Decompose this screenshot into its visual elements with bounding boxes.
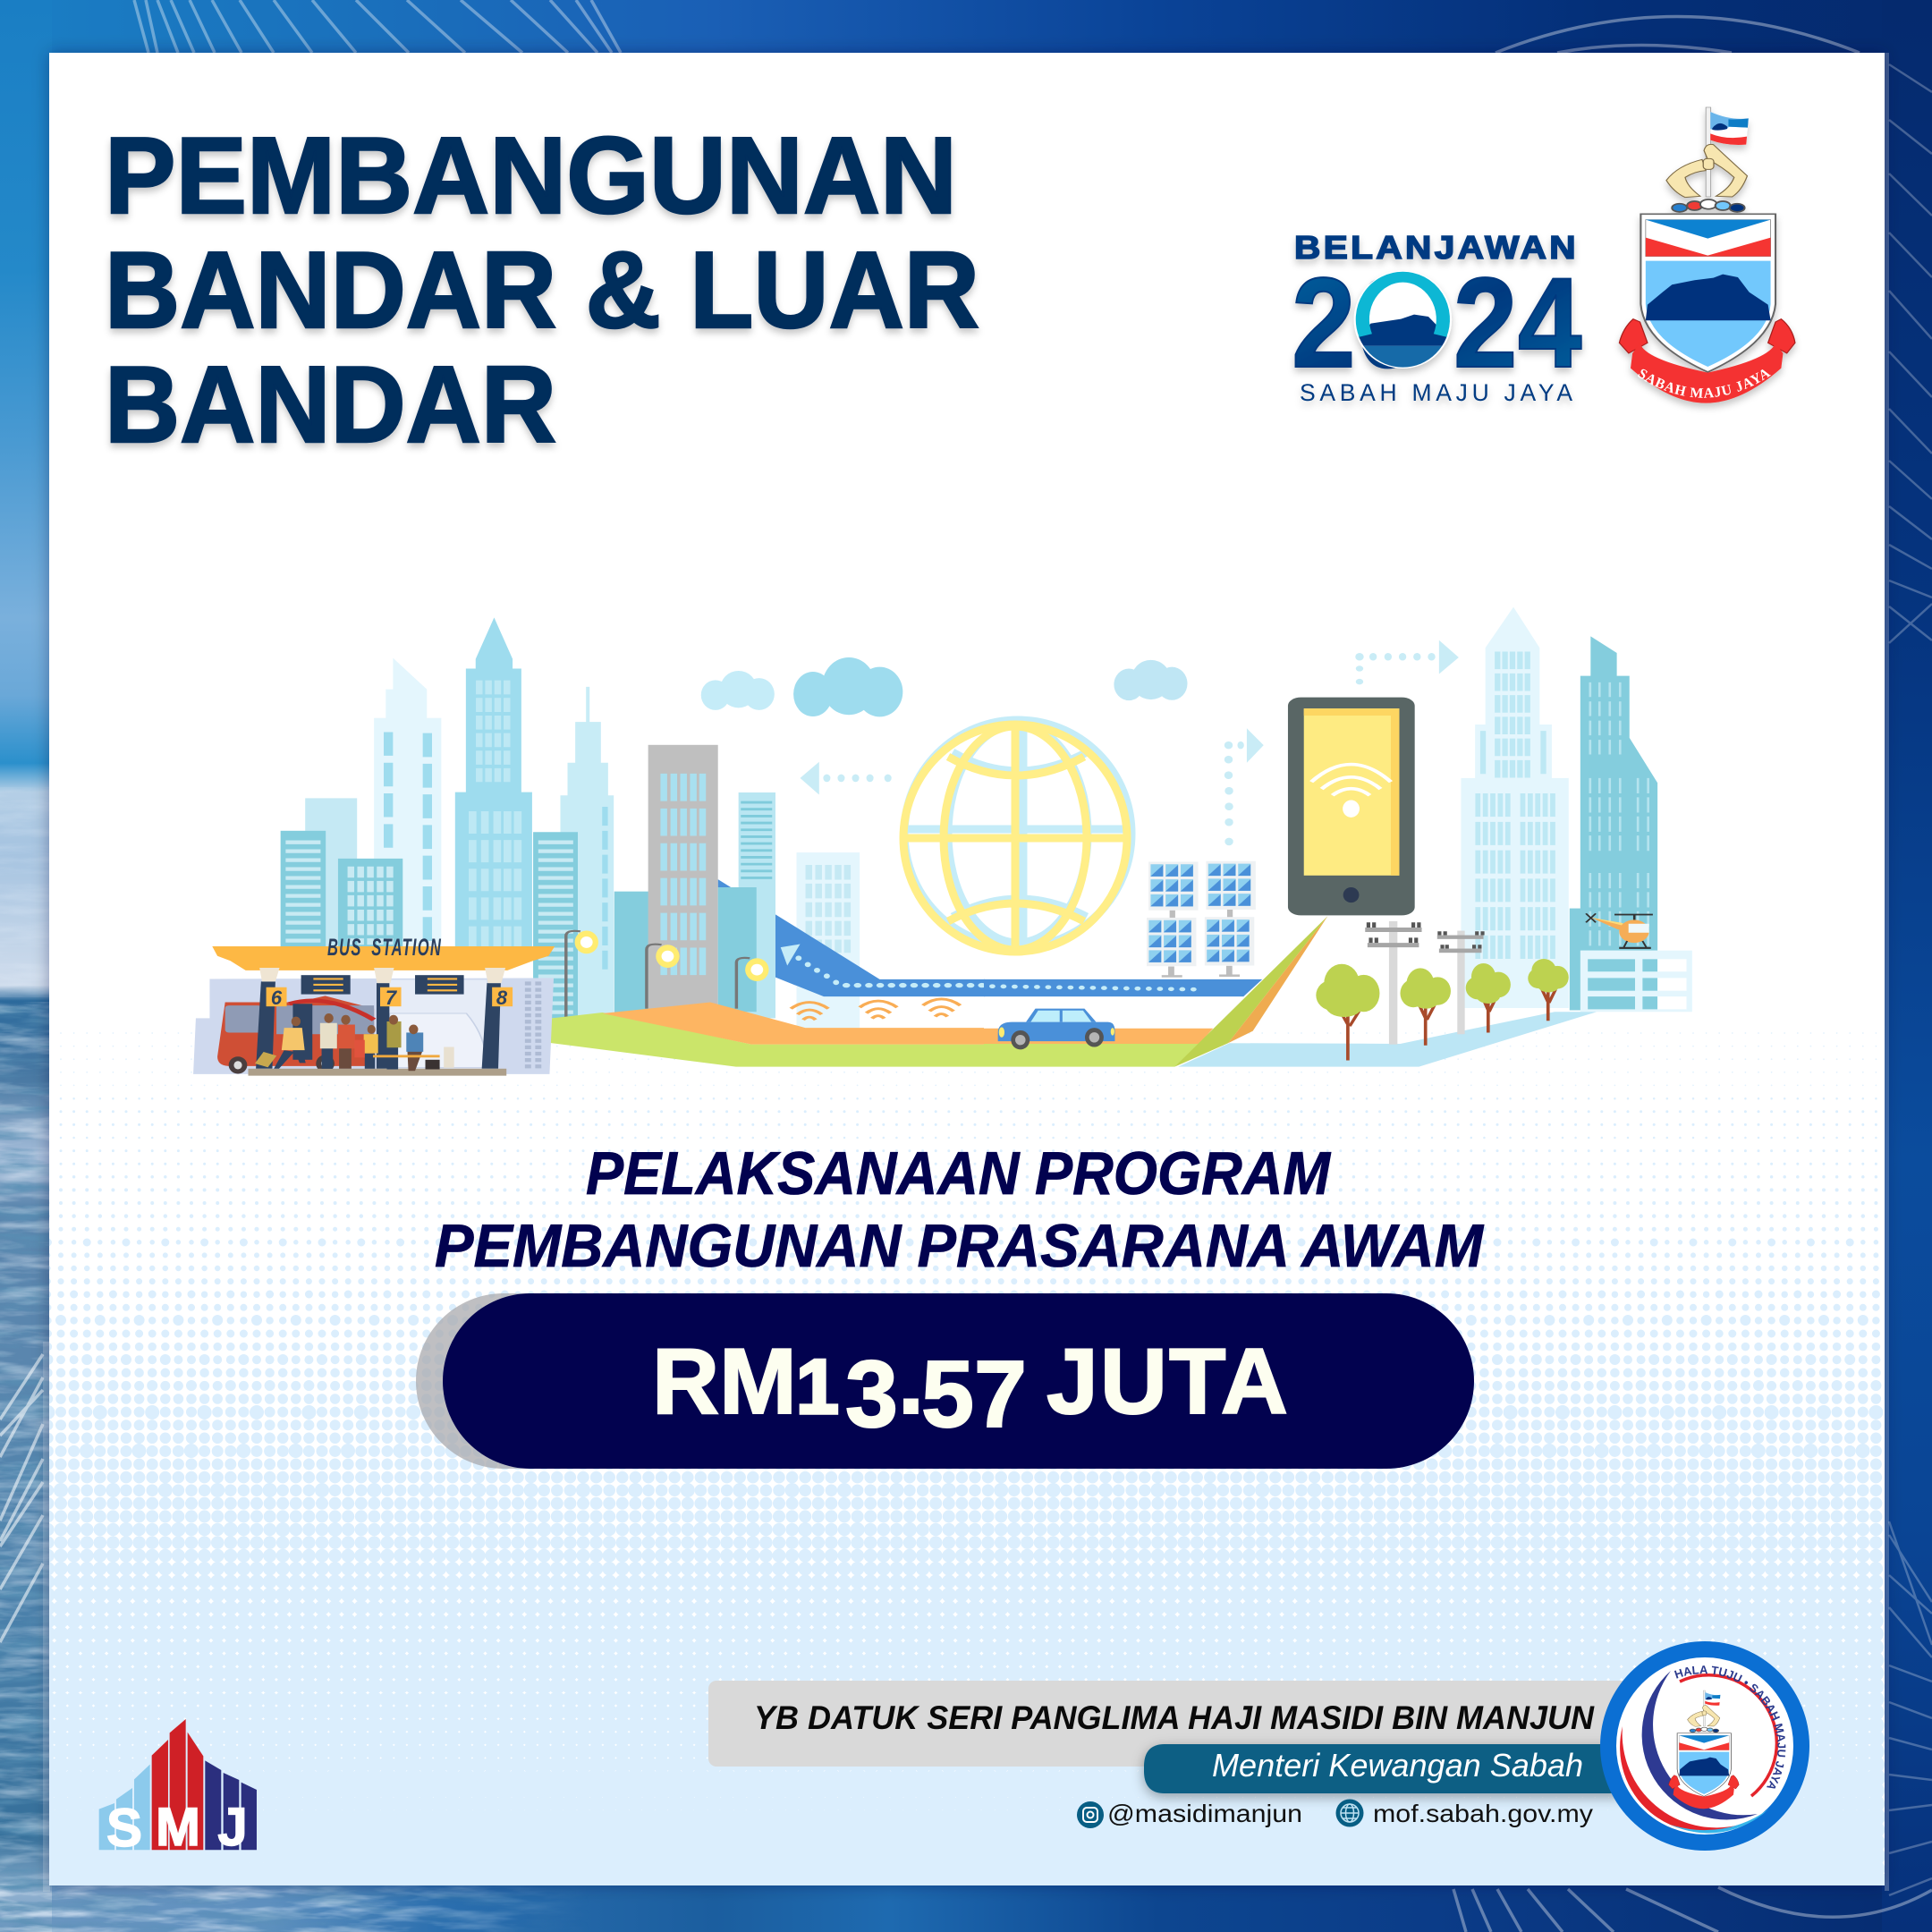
subheading (435, 1140, 1484, 1280)
amount pill (416, 1293, 1474, 1469)
trees (1316, 959, 1569, 1061)
arrows: dotted (1224, 640, 1459, 845)
clouds (701, 657, 902, 716)
logo: SMJ (99, 1719, 257, 1858)
amount text: JUTA (1046, 1330, 1290, 1434)
bus: red (217, 996, 374, 1073)
solar panels (1147, 861, 1256, 978)
amount text: RM (652, 1330, 797, 1434)
bus station sign: BUS STATION (327, 934, 442, 961)
light tower (1461, 607, 1569, 1008)
minister role pill (1144, 1744, 1623, 1793)
floor (248, 1069, 506, 1076)
platform numbers: 7 (386, 987, 398, 1009)
social links (1077, 1800, 1593, 1828)
departure boards (301, 975, 464, 995)
logo: Belanjawan 2024: 2024 (1292, 251, 1581, 394)
platform numbers: 8 (496, 987, 508, 1009)
social links: mof.sabah.gov.my (1373, 1800, 1593, 1827)
arrow: dotted left (801, 762, 892, 794)
cloud (1114, 660, 1188, 700)
title: BANDAR & LUAR (105, 229, 979, 351)
pillars (256, 981, 501, 1069)
logo: SMJ: M (156, 1797, 200, 1857)
amount text: 1 (796, 1344, 839, 1430)
subheading: PELAKSANAAN PROGRAM (586, 1140, 1331, 1208)
teal tower (1570, 636, 1692, 1012)
logo: Belanjawan 2024: BELANJAWAN (1294, 229, 1579, 266)
illustration: bus station (193, 934, 555, 1076)
mini coat of arms (1669, 1690, 1739, 1809)
logo: SMJ: J (217, 1797, 248, 1857)
illustration: city skyline, right half (984, 607, 1692, 1067)
amount text: 57 (921, 1342, 1053, 1447)
lamps (566, 931, 769, 1018)
illustration: globe (903, 720, 1131, 952)
logo: Hala Tuju Sabah Maju Jaya badge (1600, 1641, 1809, 1851)
passengers (255, 1013, 454, 1071)
social links: @masidimanjun (1107, 1800, 1302, 1827)
phone (1288, 698, 1415, 915)
helicopter (1586, 913, 1653, 949)
logo: Sabah coat of arms (1616, 107, 1798, 411)
ramp and footpath (1174, 916, 1597, 1067)
utility poles (1365, 921, 1484, 1045)
logo: Sabah coat of arms: SABAH MAJU JAYA (1638, 369, 1771, 398)
bus: white background coach (389, 1013, 487, 1068)
platform numbers (271, 987, 508, 1009)
logo: Belanjawan 2024: SABAH MAJU JAYA (1300, 379, 1572, 406)
road (507, 1003, 984, 1067)
logo: Hala Tuju Sabah Maju Jaya badge: HALA TUJU • SABAH MAJU JAYA (1674, 1665, 1785, 1789)
canopy (212, 946, 555, 970)
icon: globe (1336, 1800, 1363, 1826)
title (105, 114, 979, 465)
minister role pill: Menteri Kewangan Sabah (1212, 1747, 1583, 1784)
car (998, 1009, 1114, 1049)
title: PEMBANGUNAN (105, 114, 957, 236)
minister name bar (708, 1681, 1630, 1767)
illustration: city skyline, left half (281, 617, 985, 1067)
icon: instagram (1077, 1801, 1104, 1828)
platform numbers: 6 (271, 987, 283, 1009)
amount text: 3 (845, 1342, 898, 1447)
minister name bar: YB DATUK SERI PANGLIMA HAJI MASIDI BIN MANJUN (754, 1699, 1595, 1736)
halftone dot gradient background (47, 1033, 1885, 1885)
wifi signals (791, 999, 961, 1020)
logo: SMJ: S (106, 1798, 142, 1858)
amount text: . (898, 1330, 924, 1434)
title: BANDAR (105, 343, 556, 465)
subheading: PEMBANGUNAN PRASARANA AWAM (435, 1212, 1484, 1280)
